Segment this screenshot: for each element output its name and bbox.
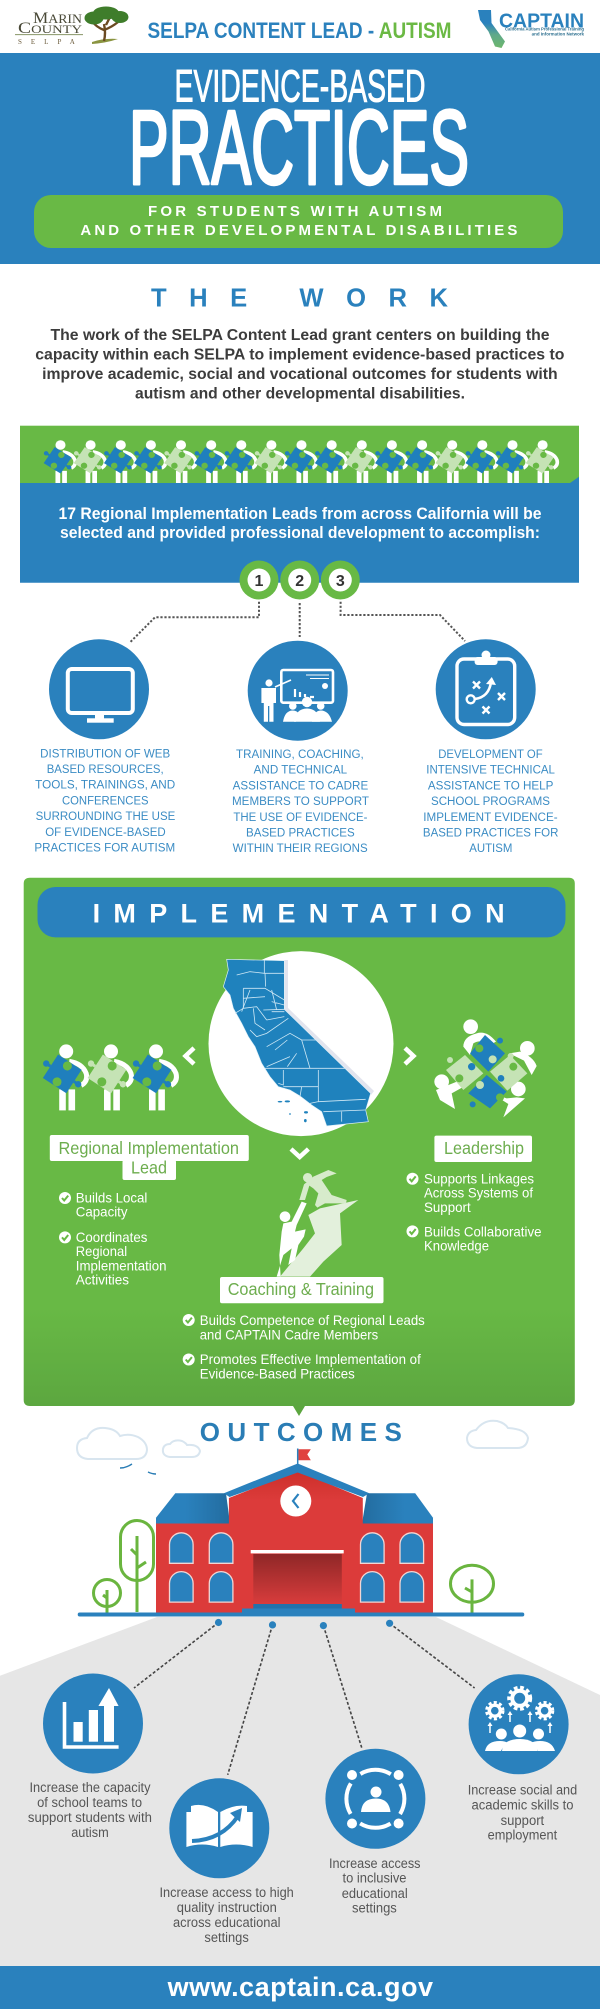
list: regional lead bullets: Capacity bbox=[76, 1205, 128, 1220]
text block: training: THE USE OF EVIDENCE- bbox=[233, 812, 368, 824]
text block: the work intro: improve academic, social and vocational outcomes for students with bbox=[42, 366, 558, 383]
logo tagline bbox=[505, 27, 585, 37]
banner text: 17 Regional Implementation Leads from across California will be bbox=[58, 505, 542, 523]
text block: outcome 1 bbox=[28, 1780, 152, 1840]
text block: the work intro bbox=[35, 327, 565, 402]
California map bbox=[208, 951, 394, 1136]
subtitle pill bbox=[34, 195, 563, 248]
icon: bar chart with arrow bbox=[43, 1674, 143, 1774]
banner text: selected and provided professional development to accomplish: bbox=[60, 524, 540, 542]
icon: training presentation bbox=[248, 641, 348, 741]
text block: distribution: SURROUNDING THE USE bbox=[36, 811, 176, 823]
heading: Outcomes: OUTCOMES bbox=[200, 1417, 402, 1447]
text block: training: AND TECHNICAL bbox=[254, 765, 348, 777]
gable bbox=[224, 1464, 369, 1497]
arrow right bbox=[405, 1048, 414, 1064]
list: coaching bullets: Builds Competence of Regional Leads bbox=[200, 1313, 425, 1328]
footer bbox=[0, 1966, 600, 2009]
heading: The Work: THE WORK bbox=[151, 285, 449, 313]
logo: CAPTAIN bbox=[478, 10, 585, 48]
logo California shape bbox=[478, 10, 505, 48]
panel: grey outcomes ground bbox=[0, 1617, 600, 1966]
icon: inclusion circle bbox=[325, 1749, 425, 1849]
text block: development: SCHOOL PROGRAMS bbox=[431, 796, 550, 808]
text block: development: DEVELOPMENT OF bbox=[438, 749, 543, 761]
text block: outcome 4: employment bbox=[488, 1828, 557, 1843]
text block: development: BASED PRACTICES FOR bbox=[423, 828, 558, 840]
text block: training: WITHIN THEIR REGIONS bbox=[233, 843, 368, 855]
text block: the work intro: autism and other developmental disabilities. bbox=[135, 386, 465, 402]
list: regional lead bullets: Implementation bbox=[76, 1258, 166, 1273]
text block: outcome 2: quality instruction bbox=[177, 1900, 277, 1915]
dotted connectors from school bbox=[134, 1619, 475, 1775]
icon: clipboard playbook bbox=[436, 639, 536, 739]
label: Regional Implementation Lead bbox=[50, 1135, 249, 1180]
text block: development: INTENSIVE TECHNICAL bbox=[426, 765, 555, 777]
numbered badges bbox=[240, 560, 360, 600]
figures: climbers bbox=[277, 1170, 358, 1277]
numbered badges: 2 bbox=[295, 573, 304, 590]
text block: training: ASSISTANCE TO CADRE bbox=[233, 780, 369, 792]
row of figures holding puzzle pieces bbox=[39, 440, 559, 485]
banner text bbox=[58, 505, 542, 542]
icon: gears and people bbox=[469, 1674, 569, 1774]
label: Regional Implementation Lead: Lead bbox=[131, 1158, 167, 1178]
text block: outcome 2: Increase access to high bbox=[160, 1885, 294, 1900]
text block: distribution: TOOLS, TRAININGS, AND bbox=[35, 780, 175, 792]
ground line bbox=[78, 1612, 524, 1616]
text block: outcome 1: support students with bbox=[28, 1810, 152, 1825]
text block: outcome 4 bbox=[468, 1783, 577, 1843]
text block: the work intro: capacity within each SELPA to implement evidence-based practices to bbox=[35, 346, 565, 364]
icon: monitor bbox=[49, 639, 149, 739]
text block: outcome 2: settings bbox=[204, 1930, 249, 1945]
list: leadership bullets: Builds Collaborative bbox=[424, 1225, 542, 1240]
text block: outcome 2 bbox=[160, 1885, 294, 1945]
logo wordmark: MARIN bbox=[33, 10, 82, 27]
implementation heading: IMPLEMENTATION bbox=[93, 899, 505, 929]
walls bbox=[156, 1524, 433, 1613]
text block: training bbox=[232, 749, 369, 855]
title line 1: EVIDENCE-BASED bbox=[174, 60, 426, 112]
list: coaching bullets: Promotes Effective Implementation of bbox=[200, 1352, 421, 1367]
text block: outcome 3 bbox=[329, 1856, 421, 1916]
text block: outcome 3: settings bbox=[352, 1901, 397, 1916]
list: leadership bullets: Supports Linkages bbox=[424, 1171, 534, 1186]
logo tree bbox=[84, 6, 128, 44]
label: Leadership: Leadership bbox=[444, 1138, 524, 1158]
icon: open book with arrow bbox=[169, 1778, 269, 1878]
arrow left bbox=[186, 1048, 194, 1064]
panel: regional leads banner bbox=[20, 426, 579, 583]
trees bbox=[94, 1520, 494, 1613]
text block: development: ASSISTANCE TO HELP bbox=[428, 780, 554, 792]
text block: outcome 2: across educational bbox=[173, 1915, 280, 1930]
text block: outcome 4: academic skills to bbox=[472, 1798, 574, 1813]
list: leadership bullets: Across Systems of bbox=[424, 1186, 533, 1201]
logo wordmark bbox=[15, 10, 84, 46]
panel: title banner bbox=[0, 53, 600, 264]
text block: outcome 4: support bbox=[501, 1813, 544, 1828]
clock bbox=[280, 1486, 311, 1516]
implementation heading bbox=[38, 887, 566, 937]
windows bbox=[170, 1533, 424, 1602]
list: coaching bullets: Evidence-Based Practices bbox=[200, 1366, 355, 1381]
logo tagline: California Autism Professional Training bbox=[505, 27, 584, 32]
text block: development: AUTISM bbox=[469, 843, 512, 855]
door bbox=[253, 1554, 342, 1604]
text block: outcome 1: autism bbox=[71, 1825, 109, 1840]
logo name: CAPTAIN bbox=[499, 10, 584, 32]
label: Coaching & Training: Coaching & Training bbox=[228, 1279, 374, 1299]
text block: outcome 4: Increase social and bbox=[468, 1783, 577, 1798]
list: leadership bullets: Support bbox=[424, 1200, 471, 1215]
text block: distribution: BASED RESOURCES, bbox=[47, 764, 164, 776]
text block: distribution: PRACTICES FOR AUTISM bbox=[34, 842, 175, 854]
text block: outcome 3: to inclusive bbox=[342, 1871, 406, 1886]
figures: regional leads bbox=[36, 1044, 178, 1110]
text block: outcome 1: Increase the capacity bbox=[30, 1780, 151, 1795]
list: regional lead bullets bbox=[59, 1191, 166, 1287]
list: leadership bullets: Knowledge bbox=[424, 1239, 489, 1254]
side roofs bbox=[156, 1493, 230, 1524]
list: regional lead bullets: Regional bbox=[76, 1244, 127, 1259]
subtitle pill: FOR STUDENTS WITH AUTISM bbox=[148, 203, 442, 220]
text block: distribution: OF EVIDENCE-BASED bbox=[45, 827, 166, 839]
school building bbox=[78, 1448, 524, 1616]
logo: Marin County SELPA bbox=[15, 6, 128, 46]
subtitle pill: AND OTHER DEVELOPMENTAL DISABILITIES bbox=[80, 222, 517, 239]
footer: www.captain.ca.gov bbox=[167, 1972, 433, 2002]
dotted connector arrows bbox=[129, 602, 465, 643]
text block: development: IMPLEMENT EVIDENCE- bbox=[423, 812, 558, 824]
text block: distribution: CONFERENCES bbox=[62, 795, 149, 807]
logo wordmark: COUNTY bbox=[18, 20, 83, 37]
text block: training: TRAINING, COACHING, bbox=[236, 749, 364, 761]
panel: implementation bbox=[24, 878, 575, 1416]
text block: outcome 3: educational bbox=[342, 1886, 408, 1901]
text block: training: BASED PRACTICES bbox=[246, 828, 355, 840]
text block: development bbox=[423, 749, 558, 855]
list: regional lead bullets: Builds Local bbox=[76, 1191, 147, 1206]
steps bbox=[253, 1604, 342, 1608]
text block: the work intro: The work of the SELPA Content Lead grant centers on building the bbox=[50, 327, 550, 344]
list: coaching bullets bbox=[183, 1313, 425, 1381]
label: Leadership bbox=[434, 1136, 532, 1162]
figures: leadership puzzle bbox=[434, 1019, 537, 1117]
text block: outcome 3: Increase access bbox=[329, 1856, 421, 1871]
logo wordmark: SELPA bbox=[18, 38, 84, 46]
numbered badges: 3 bbox=[336, 573, 345, 590]
list: coaching bullets: and CAPTAIN Cadre Members bbox=[200, 1328, 378, 1342]
label: Regional Implementation Lead: Regional Implementation bbox=[58, 1138, 239, 1158]
list: regional lead bullets: Activities bbox=[76, 1272, 129, 1287]
arrow down bbox=[291, 1149, 308, 1157]
text block: outcome 1: of school teams to bbox=[37, 1795, 142, 1810]
logo tagline: and Information Network bbox=[532, 32, 585, 37]
text block: distribution bbox=[34, 748, 176, 854]
numbered badges: 1 bbox=[255, 573, 264, 590]
flag bbox=[297, 1448, 299, 1465]
list: regional lead bullets: Coordinates bbox=[76, 1230, 148, 1245]
text block: distribution: DISTRIBUTION OF WEB bbox=[40, 748, 171, 760]
clouds and birds bbox=[77, 1421, 528, 1474]
list: leadership bullets bbox=[406, 1171, 542, 1254]
top heading: SELPA Content Lead - Autism: SELPA CONTENT LEAD - AUTISM bbox=[148, 18, 452, 43]
text block: training: MEMBERS TO SUPPORT bbox=[232, 796, 369, 808]
